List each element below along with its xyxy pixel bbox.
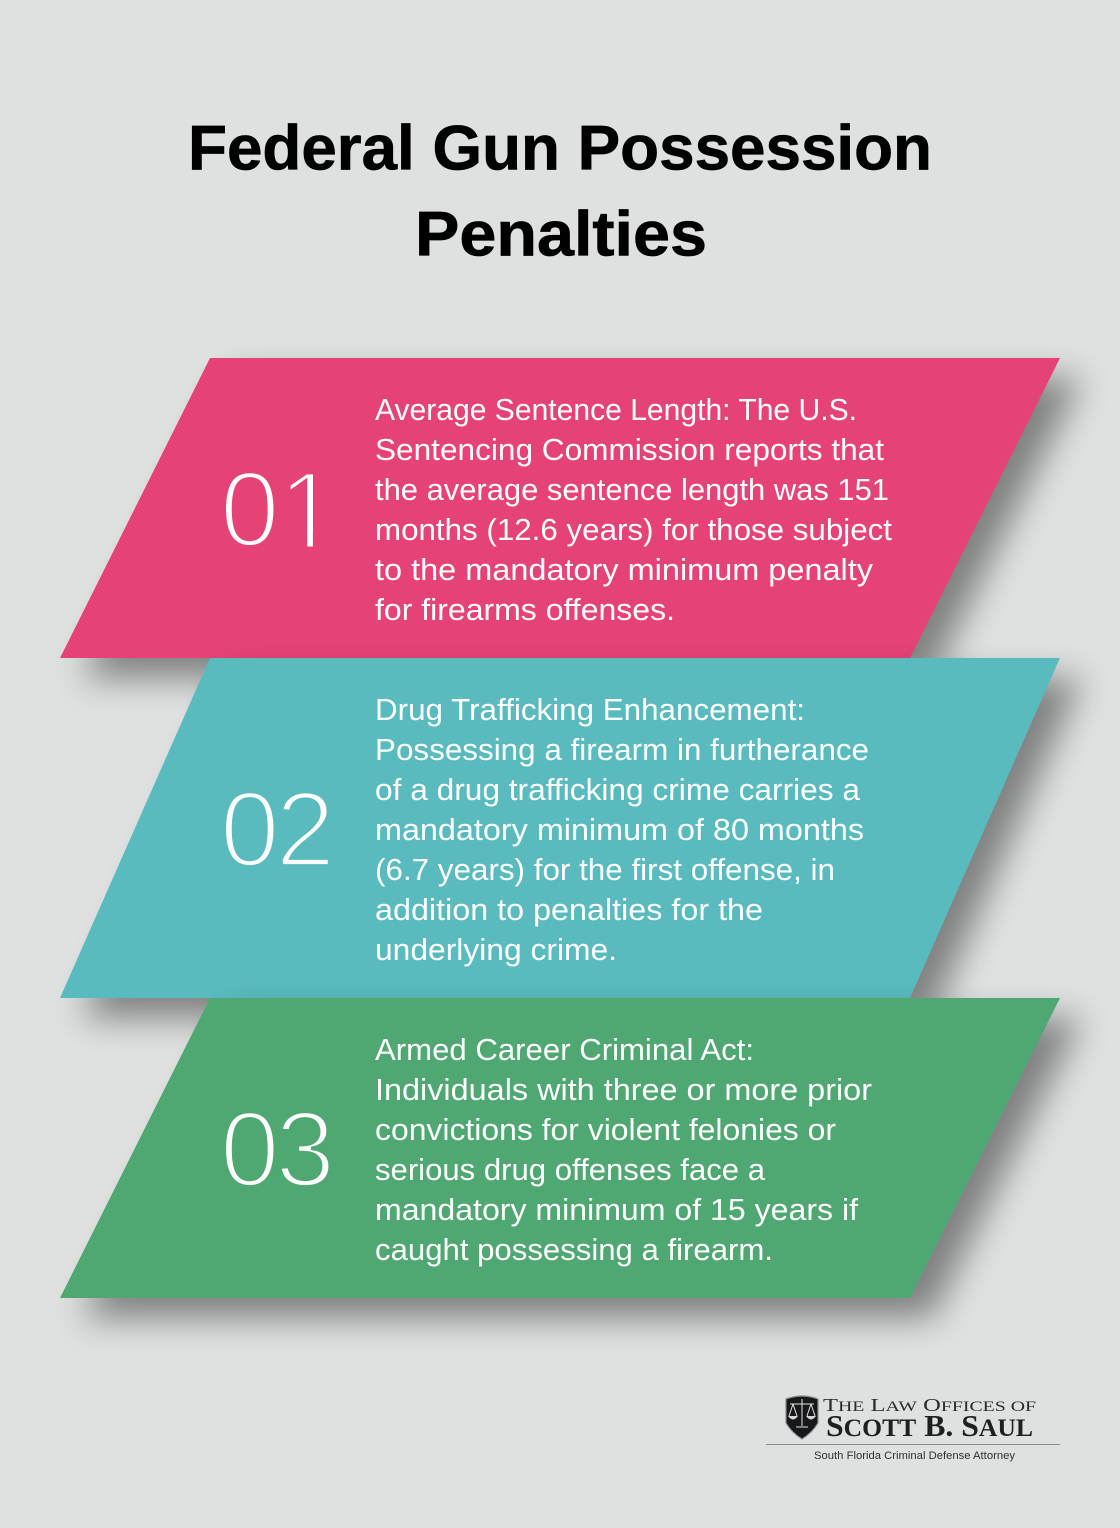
panel: 02 drug trafficking enhancement	[60, 658, 1060, 998]
text block 03: serious drug offenses face a	[375, 1152, 766, 1187]
number 02: 02	[220, 769, 335, 889]
teal parallelogram	[60, 658, 1060, 998]
logo firm name: SCOTT B. SAUL	[826, 1408, 1033, 1443]
text block 03: convictions for violent felonies or	[375, 1112, 836, 1147]
text block 01: Average Sentence Length: The U.S.	[375, 392, 857, 427]
text block 02: Possessing a firearm in furtherance	[375, 732, 869, 767]
text block 02: of a drug trafficking crime carries a	[375, 772, 861, 807]
text block 01: Sentencing Commission reports that	[375, 432, 884, 467]
text block 02: (6.7 years) for the first offense, in	[375, 852, 835, 887]
logo tagline: South Florida Criminal Defense Attorney	[814, 1450, 1016, 1462]
text block 03	[375, 1032, 872, 1267]
number 01: 01	[220, 449, 338, 569]
logo	[766, 1395, 1060, 1462]
icon: shield with scales	[786, 1396, 818, 1439]
logo divider	[766, 1444, 1060, 1445]
title: Penalties	[415, 200, 707, 270]
number 03: 03	[220, 1089, 335, 1209]
text block 03: mandatory minimum of 15 years if	[375, 1192, 858, 1227]
text block 02: addition to penalties for the	[375, 892, 763, 927]
text block 02: underlying crime.	[375, 932, 617, 967]
title: Federal Gun Possession	[188, 114, 932, 184]
text block 02	[375, 692, 869, 967]
logo firm name: T HE L AW O FFICES OF	[823, 1395, 1036, 1415]
text block 01: months (12.6 years) for those subject	[375, 512, 892, 547]
text block 01: the average sentence length was 151	[375, 472, 889, 507]
text block 01: for firearms offenses.	[375, 592, 675, 627]
text block 01: to the mandatory minimum penalty	[375, 552, 874, 587]
text block 02: mandatory minimum of 80 months	[375, 812, 864, 847]
text block 03: Individuals with three or more prior	[375, 1072, 872, 1107]
green parallelogram	[60, 998, 1060, 1298]
panel: 01 average sentence length	[60, 358, 1060, 658]
text block 03: caught possessing a firearm.	[375, 1232, 773, 1267]
panel: 03 armed career criminal act	[60, 998, 1060, 1298]
pink parallelogram	[60, 358, 1060, 658]
title	[188, 114, 932, 270]
text block 01	[375, 392, 892, 627]
text block 03: Armed Career Criminal Act:	[375, 1032, 754, 1067]
text block 02: Drug Trafficking Enhancement:	[375, 692, 805, 727]
